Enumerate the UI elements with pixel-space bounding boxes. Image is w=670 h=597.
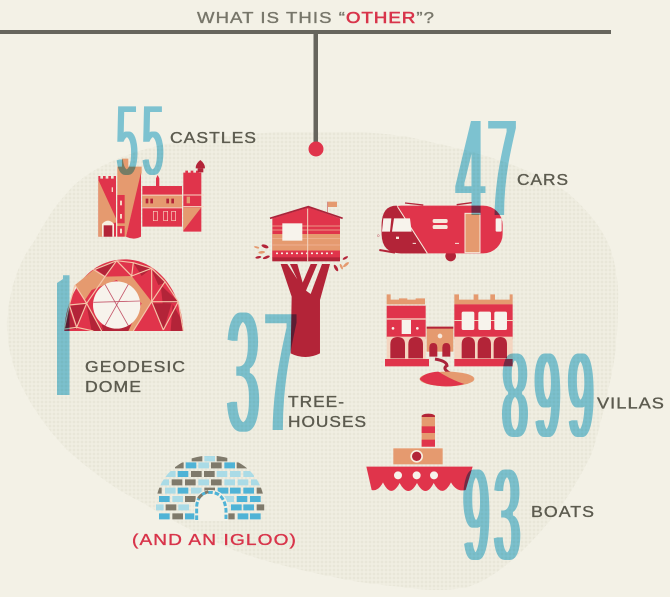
icon: villa bbox=[385, 294, 514, 386]
number: 1: 1 bbox=[19, 239, 102, 432]
icon: geodesic dome bbox=[64, 259, 183, 331]
label: tree-houses: HOUSES bbox=[288, 414, 367, 431]
icon: treehouse bbox=[254, 202, 350, 357]
label: boats: BOATS bbox=[531, 504, 595, 521]
icon: boat bbox=[366, 414, 473, 491]
number: 93: 93 bbox=[464, 441, 520, 588]
leaves bbox=[254, 244, 350, 272]
number: 47: 47 bbox=[457, 90, 516, 247]
label: castles: CASTLES bbox=[170, 130, 257, 147]
icon: igloo bbox=[154, 456, 267, 521]
number: 55: 55 bbox=[116, 85, 163, 198]
label: tree-houses: TREE- bbox=[288, 394, 345, 411]
number: 899: 899 bbox=[502, 328, 593, 463]
icon: trailer car bbox=[377, 203, 503, 262]
icon: castle bbox=[98, 159, 205, 239]
label: geodesic dome: GEODESIC bbox=[85, 359, 186, 376]
header line and pointer bbox=[0, 30, 611, 156]
label: and an igloo: (AND AN IGLOO) bbox=[132, 532, 297, 549]
title: WHAT IS THIS “ OTHER ”? bbox=[197, 10, 435, 27]
number: 37: 37 bbox=[227, 276, 297, 470]
label: villas: VILLAS bbox=[597, 396, 665, 412]
dotted background blob bbox=[7, 132, 618, 590]
label: cars: CARS bbox=[517, 172, 569, 189]
label: geodesic dome: DOME bbox=[85, 379, 142, 396]
